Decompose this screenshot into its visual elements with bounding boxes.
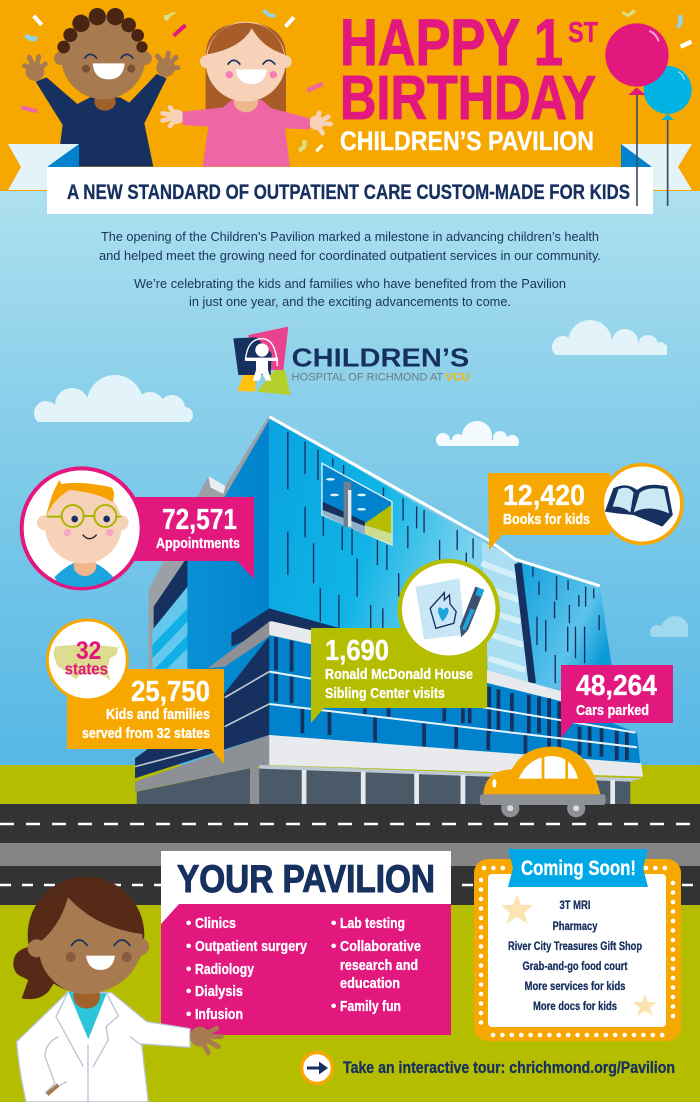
star	[633, 994, 657, 1016]
doctor character	[13, 877, 221, 1102]
logo	[233, 327, 469, 395]
car	[480, 747, 606, 817]
services list left: Infusion	[195, 1006, 243, 1023]
callout: appointments: Appointments	[156, 535, 240, 552]
intro text: The opening of the Children’s Pavilion marked a milestone in advancing children’s health	[101, 230, 599, 244]
ground	[0, 765, 700, 805]
callout: cars parked	[561, 665, 673, 738]
title: CHILDREN’S PAVILION	[340, 126, 594, 156]
lights border	[481, 868, 673, 1035]
services list left: •	[186, 1006, 191, 1023]
right tower	[517, 562, 613, 687]
icon: open book	[602, 465, 682, 543]
atrium window	[322, 463, 392, 545]
callout: books: 12,420	[503, 480, 585, 512]
callout: cars parked: Cars parked	[576, 702, 649, 719]
left wing	[149, 415, 269, 733]
services list left: Radiology	[195, 961, 255, 978]
road	[0, 804, 700, 905]
lower windows	[269, 630, 640, 765]
services list right: •	[331, 938, 336, 955]
icon: tour arrow	[302, 1052, 332, 1084]
icon: boy with glasses	[22, 468, 142, 591]
icon: US map 32 states	[47, 620, 127, 700]
logo: VCU	[445, 372, 469, 384]
icon: US map 32 states: 32	[76, 637, 101, 665]
coming soon list	[508, 898, 642, 1013]
services list right: research and	[340, 957, 418, 974]
header background	[0, 0, 700, 191]
callout: appointments	[130, 497, 254, 579]
callout: sibling center: Ronald McDonald House	[325, 666, 473, 683]
banner	[47, 167, 653, 214]
services list right: •	[331, 998, 336, 1015]
intro text: in just one year, and the exciting advancements to come.	[189, 295, 511, 309]
coming soon list: More services for kids	[524, 979, 626, 993]
roof edge	[269, 417, 600, 586]
services list left	[186, 915, 308, 1023]
callout: cars parked: 48,264	[576, 670, 657, 702]
glass stripes	[482, 563, 525, 670]
callout: kids and families: Kids and families	[106, 706, 210, 723]
panel: coming soon	[474, 849, 681, 1041]
services list right	[331, 915, 421, 1015]
clouds	[34, 320, 689, 644]
ribbon: coming soon	[508, 849, 648, 887]
services list right: education	[340, 975, 400, 992]
ribbon left	[8, 144, 79, 190]
coming soon list: Grab-and-go food court	[522, 959, 628, 973]
sky background	[0, 190, 700, 770]
white slab	[269, 735, 643, 777]
intro text: and helped meet the growing need for coordinated outpatient services in our community.	[99, 249, 601, 263]
glass right panel	[480, 540, 531, 683]
coming soon list: More docs for kids	[533, 999, 617, 1013]
left lower wing	[208, 622, 269, 668]
services list right: Collaborative	[340, 938, 421, 955]
callout: kids and families	[67, 669, 224, 764]
navy band	[231, 608, 346, 647]
ground floor	[259, 767, 630, 804]
services list right: Family fun	[340, 998, 401, 1015]
confetti	[21, 9, 324, 153]
ribbon right	[621, 144, 692, 190]
services list right: •	[331, 915, 336, 932]
services list left: •	[186, 961, 191, 978]
heading: your pavilion: YOUR PAVILION	[177, 858, 435, 901]
boy character	[25, 8, 178, 167]
logo: CHILDREN’S	[292, 343, 469, 373]
title: HAPPY 1	[340, 5, 563, 79]
callout: books: Books for kids	[503, 511, 590, 528]
coming soon list: 3T MRI	[560, 898, 590, 912]
lower field	[0, 905, 700, 1102]
services list left: •	[186, 938, 191, 955]
building	[135, 415, 643, 804]
coming soon list: Pharmacy	[552, 919, 598, 933]
callout: appointments: 72,571	[162, 504, 237, 536]
upper slab	[267, 621, 563, 702]
main facade	[269, 417, 488, 672]
callout: kids and families: served from 32 states	[82, 725, 210, 742]
services list left: Outpatient surgery	[195, 938, 308, 955]
star	[501, 894, 533, 924]
services list left: •	[186, 915, 191, 932]
balloons	[605, 9, 692, 206]
services list right: Lab testing	[340, 915, 405, 932]
ribbon: coming soon: Coming Soon!	[521, 857, 636, 880]
intro text	[99, 230, 601, 309]
callout: sibling center: Sibling Center visits	[325, 685, 445, 702]
services list left: Clinics	[195, 915, 236, 932]
lower window mullions	[276, 637, 627, 760]
facade marks	[288, 432, 599, 683]
logo: HOSPITAL OF RICHMOND AT	[292, 372, 444, 384]
services list left: •	[186, 983, 191, 1000]
callout: kids and families: 25,750	[131, 676, 210, 708]
coming soon list: River City Treasures Gift Shop	[508, 939, 642, 953]
panel: your pavilion	[161, 851, 451, 1035]
title	[340, 5, 598, 156]
girl character	[163, 22, 331, 167]
intro text: We’re celebrating the kids and families who have benefited from the Pavilion	[134, 277, 566, 291]
callout: books	[488, 473, 610, 550]
callout: sibling center: 1,690	[325, 635, 389, 667]
callout: sibling center	[311, 628, 487, 723]
title: ST	[568, 17, 598, 49]
icon: drawing and pencil	[400, 561, 498, 658]
services list left: Dialysis	[195, 983, 243, 1000]
icon: US map 32 states: states	[65, 660, 108, 679]
title: BIRTHDAY	[340, 64, 596, 133]
